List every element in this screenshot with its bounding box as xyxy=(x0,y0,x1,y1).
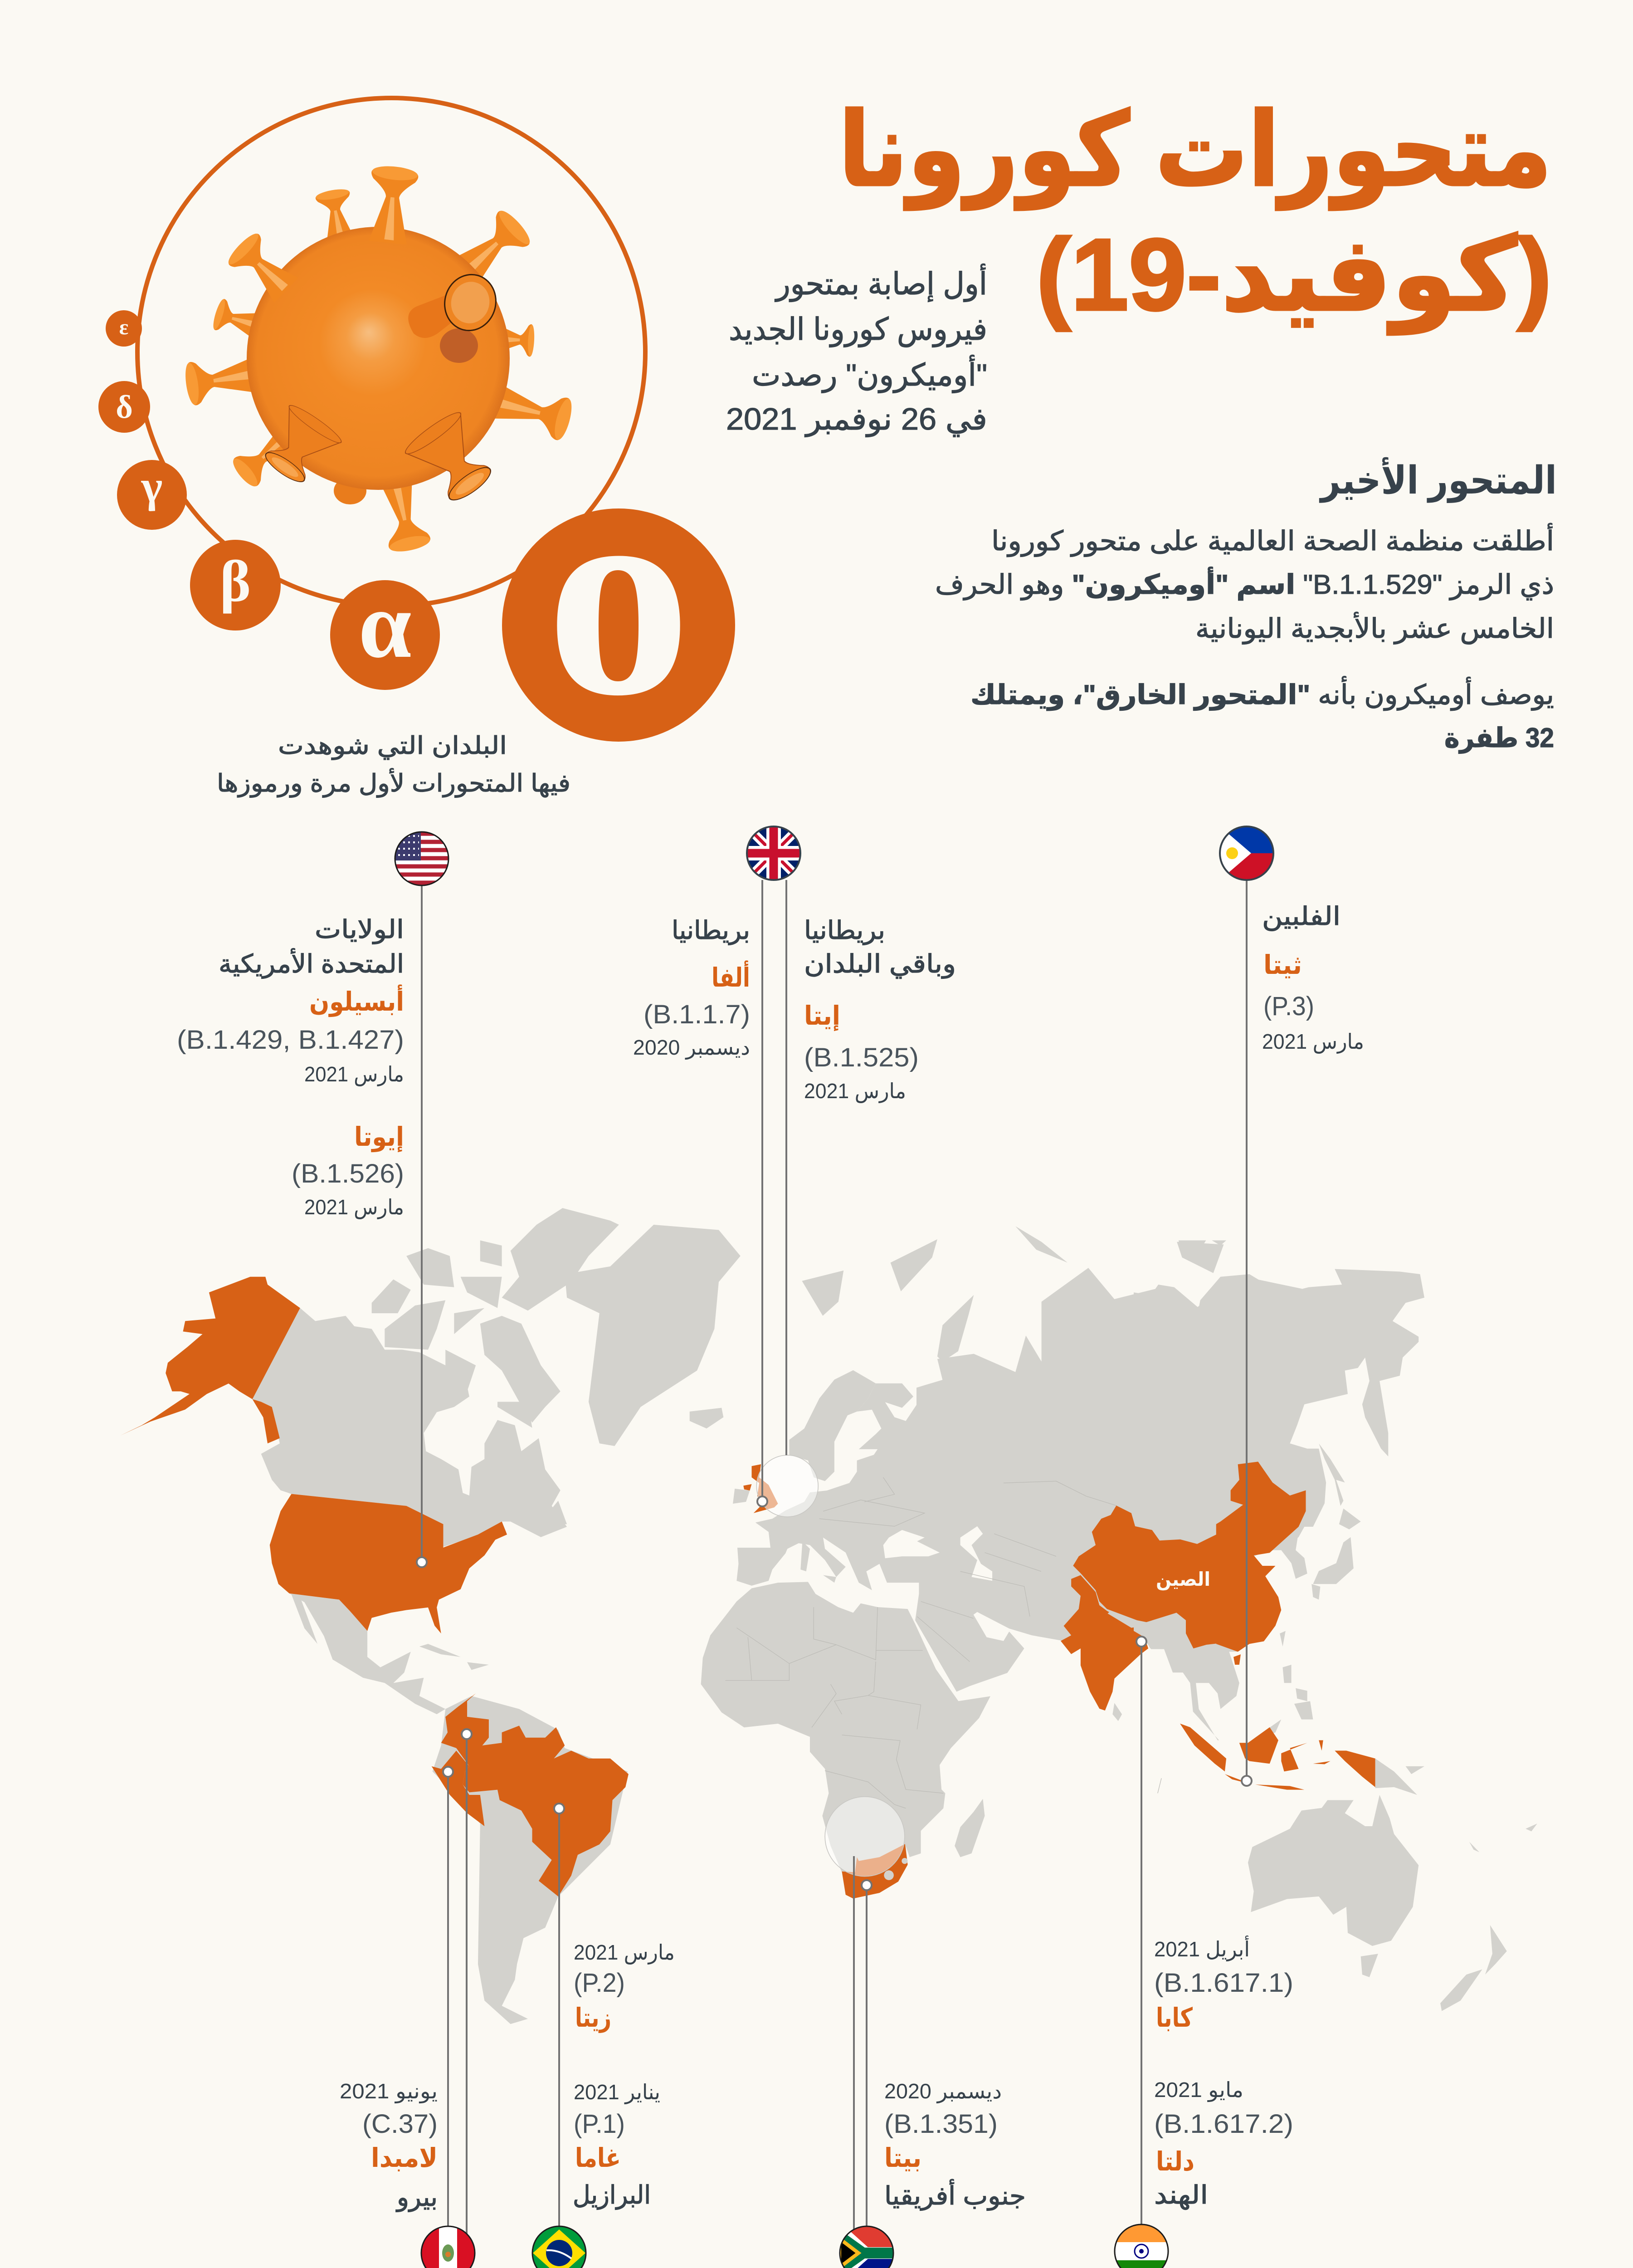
label: South Africa beta: جنوب أفريقيا xyxy=(884,2179,1026,2211)
label: United States variants: الولايات xyxy=(315,915,404,944)
map label: China: الصين xyxy=(1156,1569,1210,1591)
label: United States variants: المتحدة الأمريكية xyxy=(219,948,404,979)
text block: omicron description: يوصف أوميكرون بأنه "المتحور الخارق"، ويمتلك xyxy=(970,676,1554,711)
flag: United Kingdom xyxy=(746,826,801,880)
letter circle: beta: β xyxy=(220,549,251,614)
label: Britain and other countries eta: وباقي البلدان xyxy=(804,949,956,979)
flag: South Africa xyxy=(839,2226,894,2268)
label: Philippines theta: الفلبين xyxy=(1262,902,1341,931)
caption: countries where variants were first seen xyxy=(217,732,570,797)
caption: countries where variants were first seen: البلدان التي شوهدت xyxy=(278,732,507,760)
subtitle: first omicron case: في 26 نوفمبر 2021 xyxy=(726,402,987,437)
letter circle: gamma: γ xyxy=(141,461,162,512)
label: South Africa beta xyxy=(884,2079,1026,2211)
text block: omicron description: أطلقت منظمة الصحة العالمية على متحور كورونا xyxy=(991,523,1554,557)
heading: latest variant: المتحور الأخير xyxy=(1319,457,1557,503)
label: Brazil zeta and gamma: مارس 2021 xyxy=(574,1941,675,1965)
label: United States variants xyxy=(177,915,404,1219)
label: Peru lambda xyxy=(340,2079,438,2212)
map: Alaska xyxy=(120,1277,300,1436)
letter circle: omicron: ο xyxy=(546,435,691,756)
ring around virus xyxy=(137,98,645,606)
label: India kappa and delta: دلتا xyxy=(1156,2147,1194,2176)
variant letters in circles xyxy=(98,310,735,756)
label: United States variants: مارس 2021 xyxy=(304,1195,404,1219)
label: South Africa beta: بيتا xyxy=(884,2143,921,2173)
label: Britain and other countries eta xyxy=(804,916,956,1103)
icon: coronavirus xyxy=(183,164,575,555)
letter circle: epsilon: ε xyxy=(119,315,128,339)
label: Britain alpha: ألفا xyxy=(712,960,750,992)
letter circle: alpha: α xyxy=(358,572,412,678)
text block: omicron description: 32 طفرة xyxy=(1444,723,1554,754)
label: Brazil zeta and gamma: (P.2) xyxy=(574,1968,625,1998)
label: Philippines theta xyxy=(1262,902,1364,1054)
label: Brazil zeta and gamma: غاما xyxy=(575,2143,621,2173)
label: Britain and other countries eta: بريطانيا xyxy=(804,916,885,945)
letter circle: delta xyxy=(98,381,150,433)
label: Britain and other countries eta: إيتا xyxy=(804,1001,840,1031)
magnifier: Britain xyxy=(756,1455,818,1517)
label: India kappa and delta: كابا xyxy=(1156,2003,1193,2033)
label: United States variants: أبسيلون xyxy=(309,984,404,1017)
label: Britain alpha: ديسمبر 2020 xyxy=(633,1036,750,1060)
label: India kappa and delta: مايو 2021 xyxy=(1154,2078,1243,2102)
label: United States variants: (B.1.526) xyxy=(292,1159,404,1188)
label: Philippines theta: (P.3) xyxy=(1263,992,1314,1021)
label: Peru lambda: يونيو 2021 xyxy=(340,2079,438,2104)
subtitle: first omicron case: أول إصابة بمتحور xyxy=(775,264,987,302)
label: Peru lambda: بيرو xyxy=(395,2183,438,2212)
letter circle: gamma xyxy=(117,460,187,530)
text block: omicron description: الخامس عشر بالأبجدية اليونانية xyxy=(1195,612,1554,645)
flag: Peru xyxy=(421,2226,475,2268)
label: United States variants: إيوتا xyxy=(354,1122,404,1153)
label: India kappa and delta: (B.1.617.2) xyxy=(1154,2109,1293,2139)
text block: omicron description xyxy=(935,523,1554,754)
magnifier: Botswana xyxy=(825,1797,905,1877)
letter circle: delta: δ xyxy=(116,389,133,425)
letter circle: beta xyxy=(190,540,281,631)
flag: Brazil xyxy=(532,2226,586,2268)
map: United Kingdom xyxy=(752,1464,778,1513)
flag: Philippines xyxy=(1219,826,1274,880)
map: Indonesia xyxy=(1180,1724,1226,1771)
label: South Africa beta: (B.1.351) xyxy=(884,2109,998,2139)
letter circle: omicron xyxy=(502,435,735,756)
label: India kappa and delta: (B.1.617.1) xyxy=(1154,1968,1293,1998)
label: Britain alpha: بريطانيا xyxy=(672,916,750,945)
subtitle: first omicron case: "أوميكرون" رصدت xyxy=(752,355,987,393)
map: United States xyxy=(270,1494,507,1633)
label: United States variants: مارس 2021 xyxy=(304,1062,404,1086)
label: Britain and other countries eta: مارس 2021 xyxy=(804,1079,906,1103)
label: Brazil zeta and gamma: زيتا xyxy=(575,2003,611,2033)
label: Peru lambda: لامبدا xyxy=(371,2143,438,2173)
title: متحورات كورونا xyxy=(838,93,1552,210)
label: South Africa beta: ديسمبر 2020 xyxy=(884,2079,1002,2104)
label: Peru lambda: (C.37) xyxy=(362,2109,438,2139)
title xyxy=(838,93,1552,335)
label: Brazil zeta and gamma xyxy=(573,1941,675,2210)
letter circle: epsilon xyxy=(106,310,142,347)
subtitle: first omicron case: فيروس كورونا الجديد xyxy=(729,312,987,347)
letter circle: alpha xyxy=(330,572,440,690)
label: India kappa and delta: أبريل 2021 xyxy=(1154,1936,1250,1962)
label: Philippines theta: مارس 2021 xyxy=(1262,1030,1364,1054)
flag: United States xyxy=(395,831,449,886)
connector lines and map pins xyxy=(417,880,1252,2268)
label: India kappa and delta: الهند xyxy=(1154,2180,1208,2210)
label: Britain alpha: (B.1.1.7) xyxy=(643,1000,750,1029)
map: India xyxy=(1061,1575,1176,1711)
world map xyxy=(120,1208,1537,2024)
map: Peru xyxy=(432,1750,484,1826)
label: Brazil zeta and gamma: (P.1) xyxy=(574,2109,625,2139)
label: Philippines theta: ثيتا xyxy=(1263,950,1302,980)
caption: countries where variants were first seen: فيها المتحورات لأول مرة ورموزها xyxy=(217,768,570,797)
label: United States variants: (B.1.429, B.1.427) xyxy=(177,1025,404,1055)
flag: India xyxy=(1114,2224,1169,2268)
label: Britain and other countries eta: (B.1.525) xyxy=(804,1043,919,1072)
map: Colombia xyxy=(441,1693,489,1771)
label: Britain alpha xyxy=(633,916,750,1060)
label: India kappa and delta xyxy=(1154,1936,1293,2210)
map: South Africa xyxy=(842,1844,908,1898)
map: China xyxy=(1216,1461,1306,1652)
subtitle: first omicron case xyxy=(726,264,987,437)
title: (كوفيد-19) xyxy=(1036,217,1552,335)
label: Brazil zeta and gamma: البرازيل xyxy=(573,2180,651,2210)
text block: omicron description: ذي الرمز "B.1.1.529" اسم "أوميكرون" وهو الحرف xyxy=(935,567,1554,601)
map: Brazil xyxy=(463,1725,629,1897)
label: Brazil zeta and gamma: يناير 2021 xyxy=(574,2080,660,2105)
